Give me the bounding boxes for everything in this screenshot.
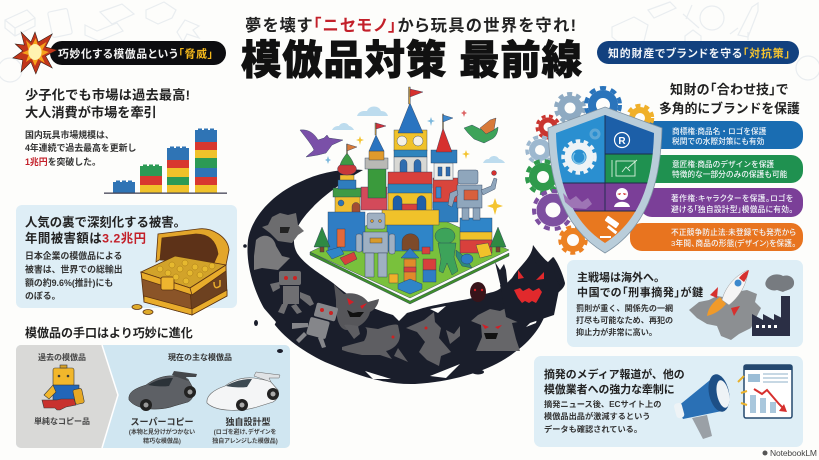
icon: gavel [600,216,619,238]
title: 夢を壊す「ニセモノ」から玩具の世界を守れ! [245,17,576,35]
panel: overseas: 罰則が重く、関係先の一網 [576,303,673,313]
icon: white original car [207,372,280,411]
icon: rocket [707,270,749,316]
monster: big flame ghost [495,255,560,325]
monster: bat creature [342,324,408,362]
illustration: toy castle [300,87,509,304]
bar: trademark: 商標権:商品名・ロゴを保護 [672,126,767,136]
bar: design: 特徴的な一部分のみの保護も可能 [672,169,788,179]
main tower [388,87,432,213]
panel: overseas: 抑止力が非常に高い。 [576,327,657,337]
icon: explosion [13,32,57,74]
credit: NotebookLM [770,448,817,458]
green tower [361,123,388,210]
cloud group [332,106,505,163]
icon: shield [548,107,662,253]
panel: media: 摘発ニュース後、ECサイト上の [544,399,661,409]
icon: factory [752,274,794,336]
icon: treasure chest [132,229,229,315]
panel: past vs present: 現在の主な模倣品 [168,352,232,362]
counter-measure banner [597,41,799,64]
panel: overseas: 主戦場は海外へ。 [577,270,665,284]
front robot [356,213,395,277]
icon: grey super car [129,371,197,411]
right tower [431,114,458,222]
heading: market record: 少子化でも市場は過去最高! [25,86,190,102]
monster: horned ghost [334,284,379,330]
panel: damage: 年間被害額は3.2兆円 [25,230,146,246]
icon: blueprint [612,160,637,177]
bar: copyright [640,188,803,217]
panel: damage: のぼる。 [25,290,60,301]
little dragon [435,228,472,275]
counter-measure banner: 知的財産でブランドを守る「対抗策」 [608,46,790,60]
illustration: dark swoosh with monsters [243,170,565,384]
panel: past vs present: 精巧な模倣品) [143,437,181,445]
panel: overseas [567,260,803,347]
text: market body: 国内玩具市場規模は、 [25,129,114,140]
bar: unfair competition: 3年間、商品の形態(デザイン)を保護。 [671,238,796,248]
text: market body: 1兆円を突破した。 [25,156,101,167]
trees [314,227,506,252]
heading: tactics: 模倣品の手口はより巧妙に進化 [25,325,193,340]
panel: past vs present: (ロゴを避け、デザインを [214,428,276,436]
heading: market record: 大人消費が市場を牽引 [25,104,157,120]
panel: past vs present: 独自設計型 [225,416,271,427]
monster: ghost top [262,213,304,243]
bar: trademark [640,121,803,149]
text: market body: 4年連続で過去最高を更新し [25,142,137,153]
bar: copyright: 著作権:キャラクターを保護。ロゴを [671,193,793,203]
panel: past vs present: 過去の模倣品 [38,352,86,362]
bar: unfair competition [630,223,803,251]
icon: registered mark: R [618,136,626,147]
panel: past vs present [16,345,290,448]
walls [328,210,492,253]
title [241,17,582,83]
panel: media: 模倣業者への強力な牽制に [544,382,675,396]
monster: grey ghost [254,236,290,270]
panel: media: 模倣品出品が激減するという [544,411,650,421]
bar: copyright: 避ける「独自設計型」模倣品に有効。 [671,204,793,214]
left onion tower [333,144,361,219]
bar: unfair competition: 不正競争防止法:未登録でも発売から [671,227,796,237]
panel: overseas: 中国での「刑事摘発」が鍵 [577,285,703,299]
board [310,252,509,304]
icon: toy figure [42,365,85,410]
monster: robot [270,271,314,314]
chart: toy brick bars [104,128,227,194]
sparkles [325,110,503,215]
title: 模倣品対策 最前線 [241,37,582,83]
threat banner [13,32,226,74]
monster: small red-eyed ghost [470,282,486,302]
panel: past vs present: (本物と見分けがつかない [129,428,195,436]
icon: megaphone [673,372,733,439]
panel: past vs present: 独自アレンジした模倣品) [212,437,278,445]
green dragon [464,118,498,143]
panel: media: 摘発のメディア報道が、他の [544,367,685,381]
icon: registered mark [614,132,630,148]
panel: damage: 被害は、世界での総輸出 [25,264,123,274]
threat banner: 巧妙化する模倣品という「脅威」 [58,46,213,60]
panel: past vs present: 単純なコピー品 [34,416,90,426]
bar: trademark: 税関での水際対策にも有効 [672,136,765,146]
panel: past vs present: スーパーコピー [131,417,193,427]
heading: IP combination: 知財の「合わせ技」で [670,82,789,97]
icon: china map [689,290,761,340]
panel: overseas: 打尽も可能なため、再犯の [576,315,673,325]
icon: gears behind shield [527,88,652,253]
text: market body [25,129,137,167]
robot on wall [448,170,497,220]
panel: damage: 日本企業の模倣品による [25,250,122,261]
icon: mascot [614,188,630,207]
panel: damage: 額の約9.6%(推計)にも [25,277,113,288]
monster: robot two [292,302,338,348]
purple bat [300,130,343,157]
panel: media [534,356,803,447]
heading: IP combination: 多角的にブランドを保護 [659,101,800,116]
bar: design: 意匠権:商品のデザインを保護 [672,159,774,169]
heading: IP combination [659,82,800,116]
bar: design [640,155,803,183]
toys [326,243,492,294]
icon: shield white gear [563,130,599,173]
monster: tree creature [471,307,524,351]
heading: market record [25,86,190,120]
list: rights bars [630,121,803,251]
panel: damage [16,205,237,315]
monster: winged dragon [406,312,460,366]
icon: falling chart [738,365,792,418]
panel: damage: 人気の裏で深刻化する被害。 [25,214,186,230]
panel: media: データも確認されている。 [544,424,642,434]
